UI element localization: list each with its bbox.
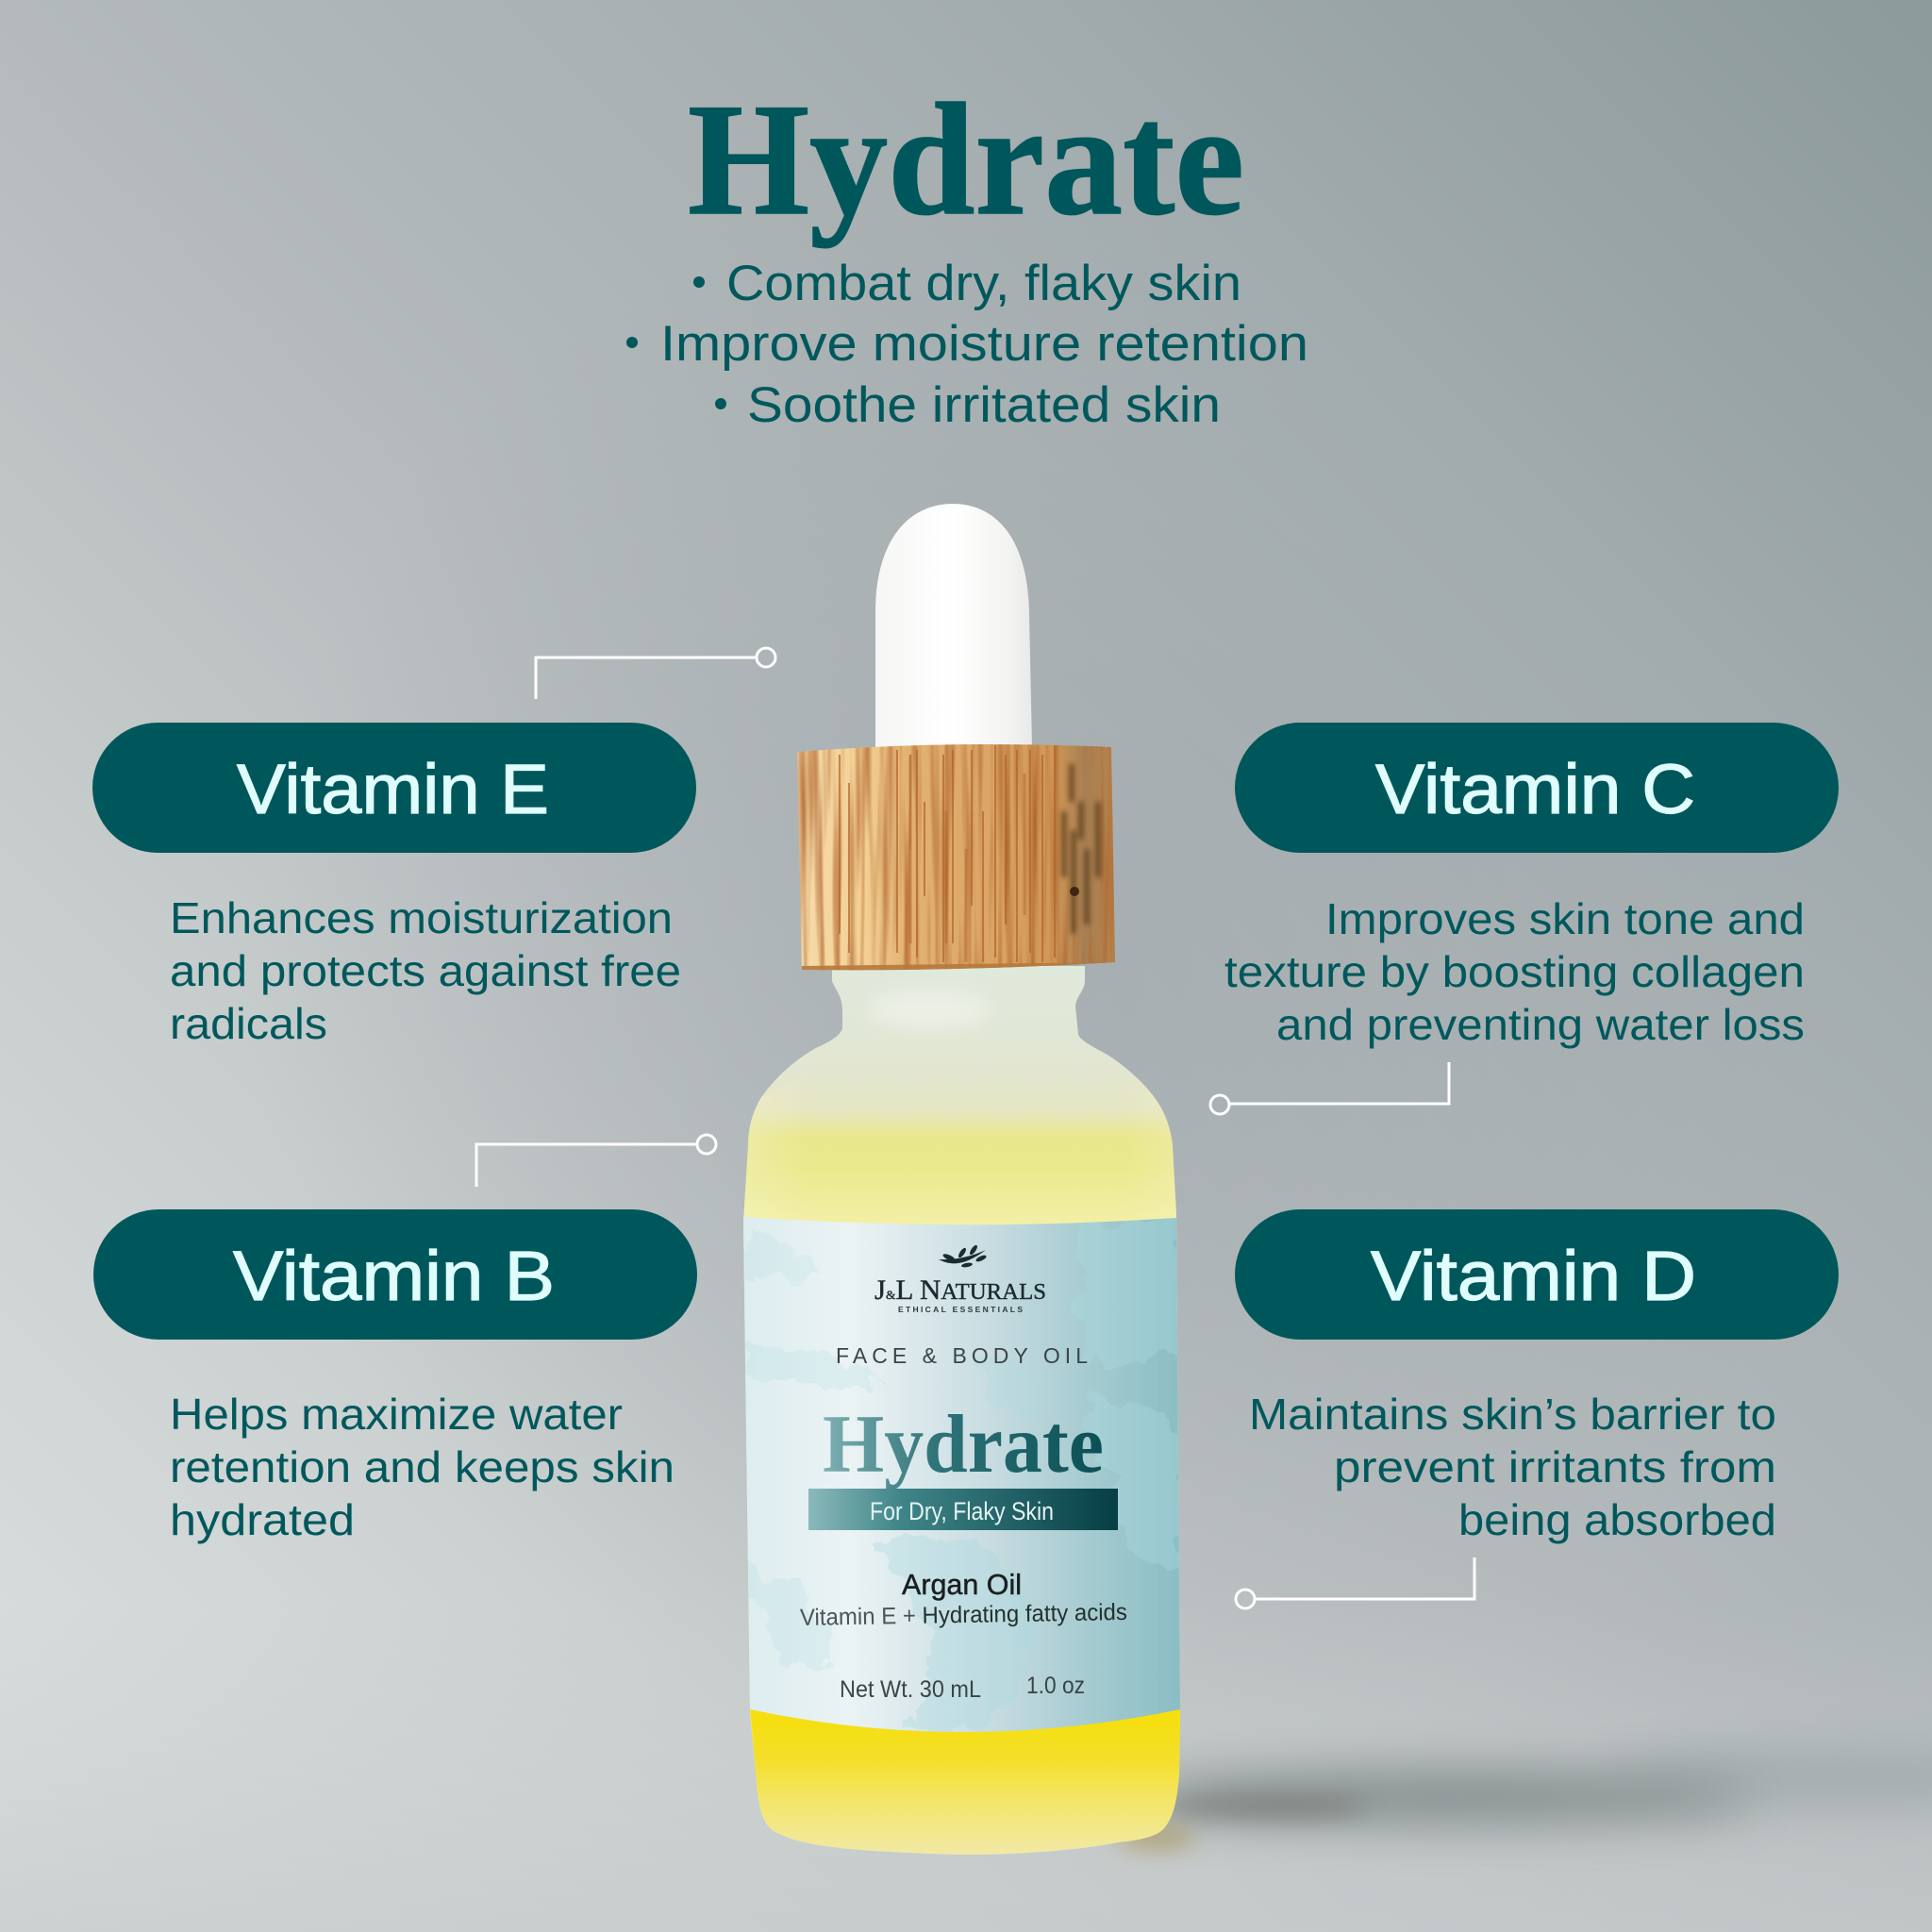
text: Vitamin D description: Maintains skin’s barrier to [1249,1390,1776,1439]
bullet: combat dry skin: Combat dry, flaky skin [726,256,1241,311]
pill: Vitamin E [92,723,696,853]
logo: tagline: ETHICAL ESSENTIALS [898,1305,1023,1314]
pill: Vitamin C [1235,723,1839,853]
watercolor texture [745,1217,1184,1736]
text: Vitamin C description [1224,894,1805,1049]
text: Vitamin C description: and preventing water loss [1276,1000,1805,1049]
connector: Vitamin B [476,1135,716,1187]
benefit bullets [626,256,1308,433]
text: Vitamin D description [1249,1390,1776,1544]
glass bottle body [743,966,1180,1855]
label: net weight ml: Net Wt. 30 mL [840,1676,981,1703]
pill: Vitamin B [93,1209,697,1340]
logo: sprig [939,1244,987,1268]
pill: Vitamin D: Vitamin D [1371,1237,1696,1315]
text: Vitamin B description: retention and keeps skin [170,1442,675,1491]
title: Hydrate [688,71,1244,248]
wooden collar [792,736,1118,976]
text: Vitamin C description: Improves skin tone and [1325,894,1805,943]
product bottle [743,504,1180,1855]
logo: brand name: J&L NATURALS [874,1274,1046,1306]
text: Vitamin B description: hydrated [170,1495,355,1544]
label: subtitle bar [808,1489,1118,1530]
connector: Vitamin C [1210,1062,1449,1114]
glass edge frost [743,1074,1176,1222]
bullet: improve moisture retention: Improve moisture retention [660,316,1308,372]
neck highlight [868,991,991,1028]
connector: Vitamin E [536,648,775,699]
text: Vitamin E description [170,893,681,1048]
label: net weight oz: 1.0 oz [1026,1673,1085,1699]
text: Vitamin E description: Enhances moisturization [170,893,673,942]
connector: Vitamin D [1236,1557,1474,1608]
pill: Vitamin C: Vitamin C [1375,750,1695,828]
pill: Vitamin B: Vitamin B [233,1237,555,1315]
text: Vitamin D description: being absorbed [1458,1495,1776,1544]
label: ingredient details: Vitamin E + Hydrating fatty acids [800,1599,1127,1631]
label: ingredient: Argan Oil [902,1568,1022,1601]
oil band under label [750,1707,1180,1855]
dropper bulb [875,504,1032,747]
bullet: soothe irritated skin: Soothe irritated skin [747,377,1221,433]
text: Vitamin B description [170,1390,675,1544]
pill: Vitamin E: Vitamin E [237,750,549,828]
text: Vitamin B description: Helps maximize water [170,1390,623,1439]
label: product name: Hydrate [823,1399,1104,1491]
pill: Vitamin D [1235,1209,1839,1340]
text: Vitamin D description: prevent irritants from [1334,1442,1776,1491]
text: Vitamin E description: and protects against free [170,946,681,995]
text: Vitamin E description: radicals [170,999,327,1048]
label: subtitle bar: For Dry, Flaky Skin [870,1497,1054,1525]
cast shadow of bottle [1113,1756,1932,1849]
product label [736,1212,1189,1750]
label: product type: FACE & BODY OIL [836,1343,1088,1368]
text: Vitamin C description: texture by boosting collagen [1224,947,1805,996]
